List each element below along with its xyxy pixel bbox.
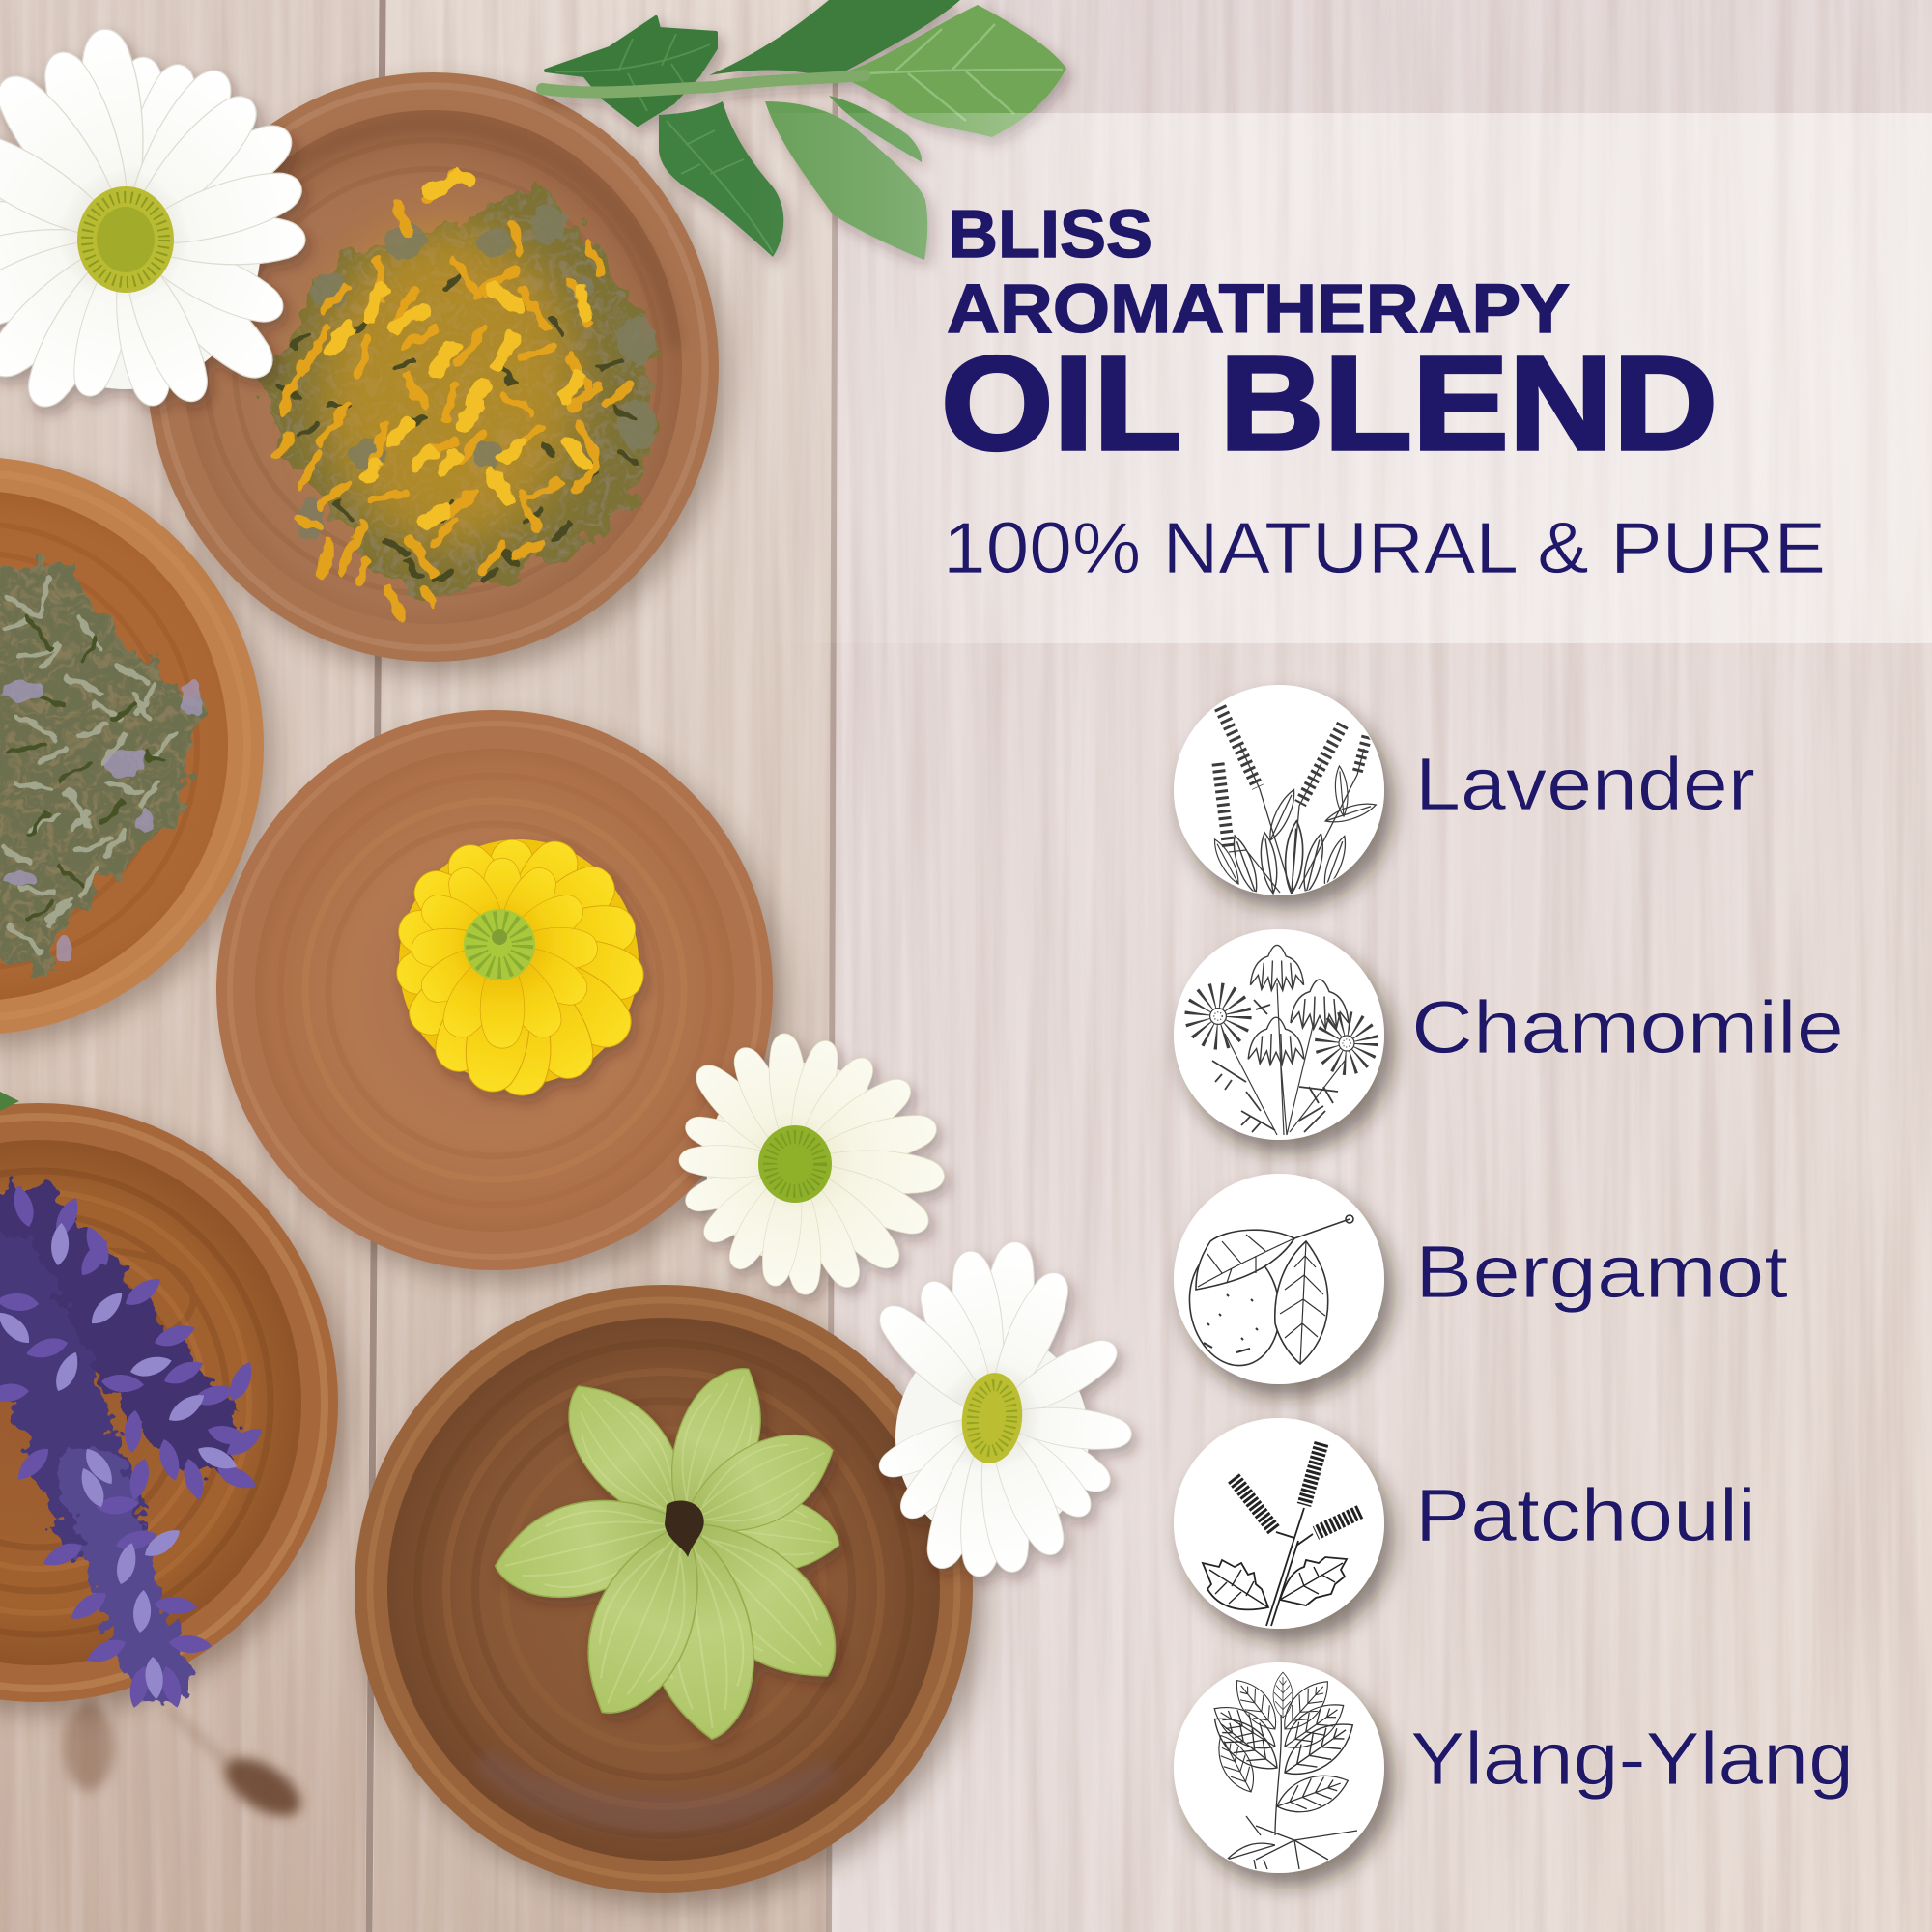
plate: green petals [355,1285,982,1906]
heading band [744,113,1932,643]
lilac blossoms [2,680,203,962]
plate: yellow flower [216,710,784,1283]
lavender dark core [0,1227,198,1671]
icon: bergamot [1174,1174,1384,1384]
daisy: lower right [868,1238,1134,1578]
right board [832,0,1932,1932]
ingredient: ylang-ylang [1174,1662,1854,1873]
leaf: small [829,96,922,162]
icon: lavender [1174,685,1384,896]
label: Lavender: Lavender [1415,743,1755,826]
green petal flower [486,1353,865,1746]
grey flower heads [298,203,657,543]
inner petals [412,858,597,1048]
icon: patchouli [1174,1418,1384,1629]
herb base [261,184,657,598]
cream daisy centre [758,1125,832,1203]
thyme base [0,560,198,971]
green petals [486,1353,865,1746]
dried thyme herb pile [0,560,203,971]
leaf: lower left [659,101,783,257]
ochre glow [319,227,580,546]
dark herb flecks [280,276,636,580]
label: Ylang-Ylang: Ylang-Ylang [1410,1718,1854,1801]
yellow petals [276,172,628,618]
outer petals [392,832,648,1098]
green flower core [665,1501,704,1557]
plate: calendula [147,72,728,674]
yellow flower [392,832,648,1098]
lower daisy centre [957,1370,1027,1466]
ingredient: chamomile [1174,929,1844,1140]
leaf: bright right [837,5,1066,137]
leaf: upper left dark [546,17,716,125]
label: Patchouli: Patchouli [1415,1474,1756,1557]
title block [941,196,1826,588]
left board [0,0,379,1932]
green leaf sprig [542,0,1066,260]
lavender sprigs [0,1183,268,1710]
leaf: top dark [709,0,960,79]
daisy: large top left [0,26,308,417]
lavender buds light [0,1222,240,1699]
lavender buds purple [0,1183,268,1710]
dried calendula herb pile [261,172,657,618]
sprig stem [542,75,865,92]
plate: dried thyme [0,457,273,1046]
daisy petals [0,26,308,417]
label: Chamomile: Chamomile [1411,986,1844,1069]
title line: Aromatherapy: AROMATHERAPY [947,271,1570,348]
label: Bergamot: Bergamot [1415,1231,1788,1314]
thyme strands [5,580,174,951]
ingredient: bergamot [1174,1174,1788,1384]
subtitle: 100% NATURAL & PURE [943,507,1826,588]
ingredient: patchouli [1174,1418,1756,1629]
daisy centre [77,186,174,293]
daisy: cream centre right [678,1032,946,1296]
icon: ylang-ylang [1174,1662,1384,1873]
flower base [399,839,639,1085]
wood knots [64,1702,310,1828]
title line: Oil Blend: OIL BLEND [941,329,1718,478]
middle board [373,0,833,1932]
leaf: lower right [765,101,927,260]
small leaf at left edge [0,1092,19,1111]
ingredient: lavender [1174,685,1755,896]
plate: lavender [0,1103,348,1714]
title line: Bliss: BLISS [948,196,1152,271]
icon: chamomile [1174,929,1384,1140]
flower centre [464,909,535,980]
